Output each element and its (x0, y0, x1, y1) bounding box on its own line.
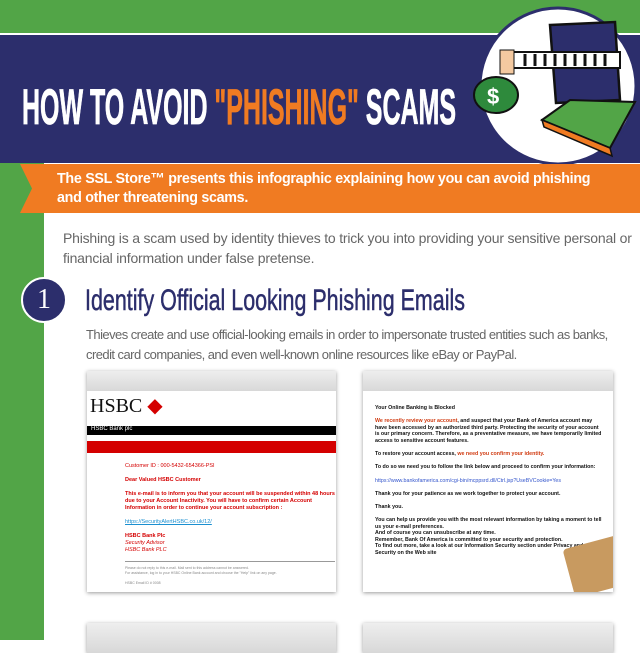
card: HSBC email: HSBC Bank plc (91, 426, 132, 432)
card: HSBC email: HSBC Email ID # 0008 (125, 581, 161, 585)
card: Bank of America email: To restore your account access, we need you confirm your identity. (375, 451, 544, 457)
orange subtitle banner: The SSL Store™ presents this infographic explaining how you can avoid phishing and other threatening scams. (57, 171, 590, 206)
left green strip (0, 163, 44, 640)
card: HSBC email: This e-mail is to inform you that your account will be suspended within 48 hours due to your Account Inactivity. You will have to confirm certain Account Information in order to continue your account subscription : (125, 491, 335, 511)
card: HSBC email (87, 371, 336, 592)
card: bottom left (partial) (87, 623, 336, 653)
card: HSBC email: HSBC Bank PLC (125, 547, 167, 553)
card: HSBC email: For assistance, log in to your HSBC Online Bank account and choose the "Help" link on any page. (125, 571, 277, 575)
orange subtitle banner (20, 164, 640, 213)
icon: laptop thief illustration (473, 6, 636, 164)
card: Bank of America email: You can help us provide you with the most relevant information by taking a moment to tell us your e-mail preferences. (375, 517, 602, 530)
icon: laptop thief illustration: $ (487, 84, 499, 109)
card: Bank of America email (363, 371, 613, 592)
card: Bank of America email: We recently review your account, and suspect that your Bank of America account may have been accessed by an authorized third party. Protecting the security of your account is our primary concern. Therefore, as a preventative measure, we have temporarily limited access to sensitive account features. (375, 418, 601, 444)
section description: Thieves create and use official-looking emails in order to impersonate trusted entities such as banks, credit card companies, and even well-known online resources like eBay or PayPal. (86, 327, 608, 362)
card: Bank of America email: And of course you can unsubscribe at any time. (375, 530, 496, 536)
card: Bank of America email: Remember, Bank Of America is committed to your security and protection. (375, 537, 563, 543)
card: HSBC email: https://SecurityAlertHSBC.co.uk/12/ (125, 519, 212, 525)
card: bottom right (partial) (363, 623, 613, 653)
card: Bank of America email: https://www.bankofamerica.com/cgi-bin/mcppsrd.dll/Ctrl.jsp?UseBVCookie=Yes (375, 478, 561, 484)
card: HSBC email: Dear Valued HSBC Customer (125, 477, 201, 483)
top green band (0, 0, 640, 33)
icon: card reader device (563, 534, 633, 598)
card: HSBC email: HSBC Bank Plc (125, 533, 165, 539)
card: HSBC email: Customer ID : 000-5432-654366-PSI (125, 463, 215, 469)
card: Bank of America email: To find out more, take a look at our Information Security section under Privacy and Security on the Web site (375, 543, 583, 556)
card: Bank of America email: Your Online Banking is Blocked (375, 405, 455, 411)
number badge 1 (21, 277, 67, 323)
number badge 1: 1 (37, 284, 51, 315)
card: HSBC email: HSBC ◆ (90, 395, 163, 417)
card: HSBC email: Please do not reply to this e-mail. Mail sent to this address cannot be answered. (125, 566, 249, 570)
card: HSBC email: Security Advisor (125, 540, 165, 546)
navy header band (0, 35, 640, 163)
card: Bank of America email: To do so we need you to follow the link below and proceed to confirm your information: (375, 464, 595, 470)
intro text: Phishing is a scam used by identity thieves to trick you into providing your sensitive personal or financial information under false pretense. (63, 230, 632, 266)
card: Bank of America email: Thank you for your patience as we work together to protect your account. (375, 491, 560, 497)
card: Bank of America email: Thank you. (375, 504, 403, 510)
